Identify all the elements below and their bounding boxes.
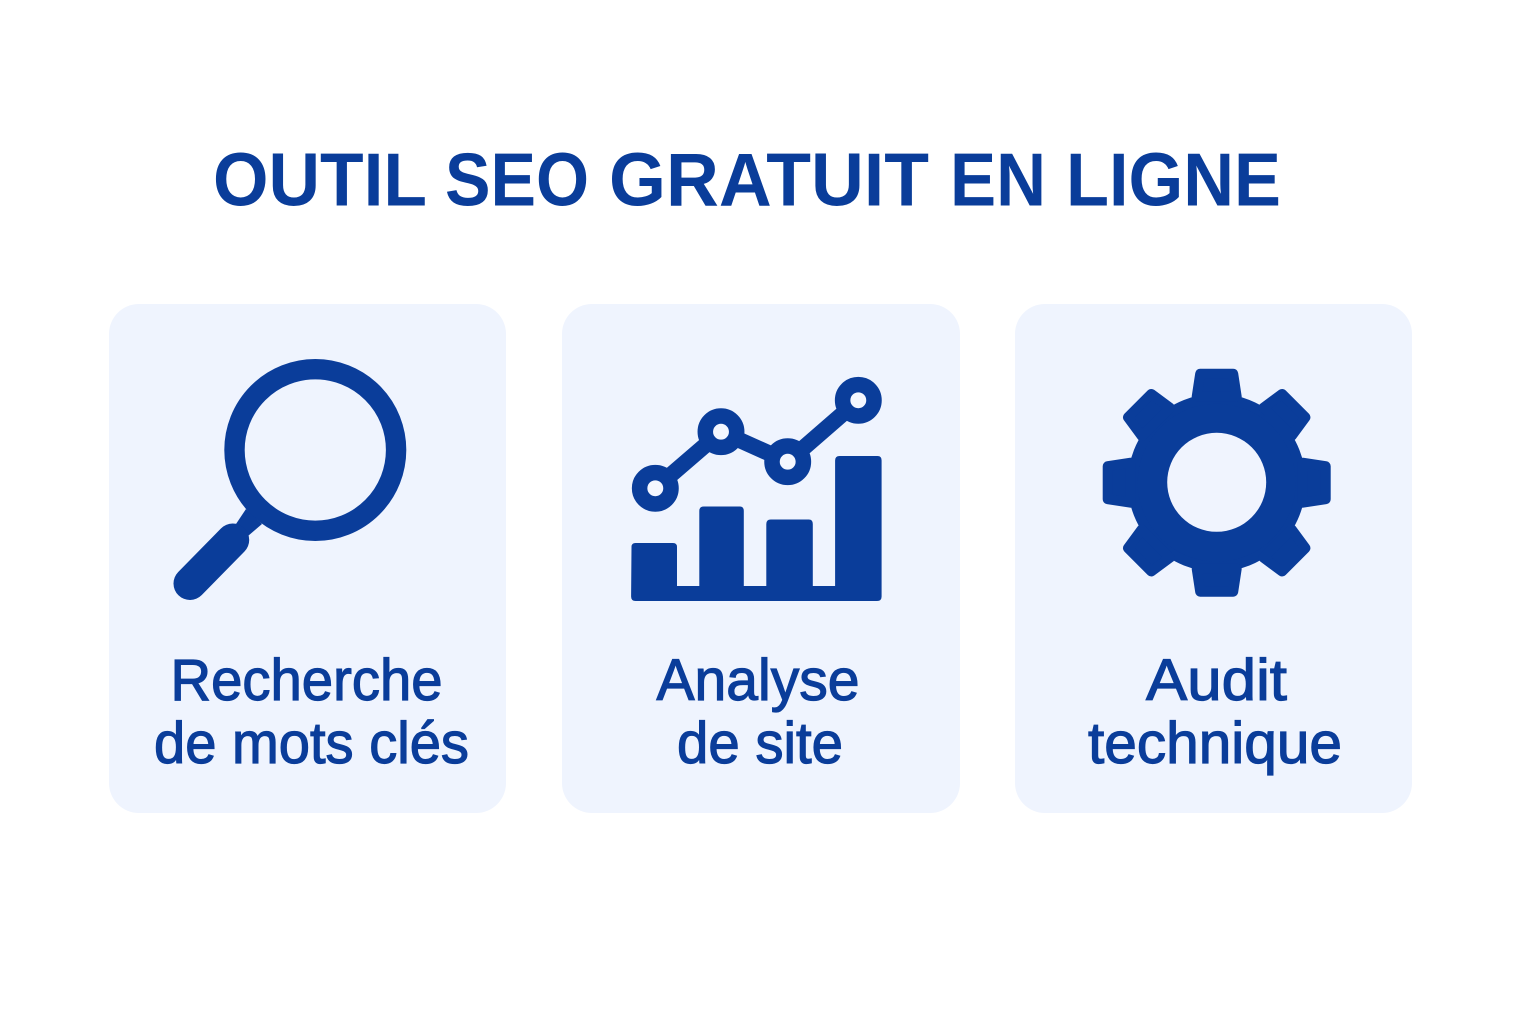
label: audit technique: Audit (1146, 648, 1287, 713)
label: audit technique (1088, 648, 1342, 776)
label: audit technique: technique (1088, 711, 1342, 776)
title (213, 138, 1281, 222)
panel: analyse de site (562, 304, 960, 813)
icon: gear (1108, 374, 1326, 592)
label: analyse de site (656, 648, 860, 776)
icon: magnifying glass (190, 369, 396, 584)
card background (109, 304, 506, 813)
label: recherche de mots clés: de mots clés (154, 711, 469, 776)
label: analyse de site: Analyse (656, 648, 860, 713)
title: SEO (445, 138, 589, 222)
label: recherche de mots clés (154, 648, 469, 776)
title: EN (950, 138, 1046, 222)
panel: audit technique (1015, 304, 1412, 813)
trend line (655, 400, 858, 488)
panel: recherche de mots clés (109, 304, 506, 813)
title: OUTIL (213, 138, 427, 222)
label: recherche de mots clés: Recherche (170, 648, 442, 713)
title: GRATUIT (609, 138, 929, 222)
data points (640, 385, 874, 504)
label: analyse de site: de site (677, 711, 843, 776)
card background (562, 304, 960, 813)
card background (1015, 304, 1412, 813)
icon: bar and line chart (631, 385, 882, 601)
title: LIGNE (1066, 138, 1281, 222)
bars (631, 456, 882, 601)
